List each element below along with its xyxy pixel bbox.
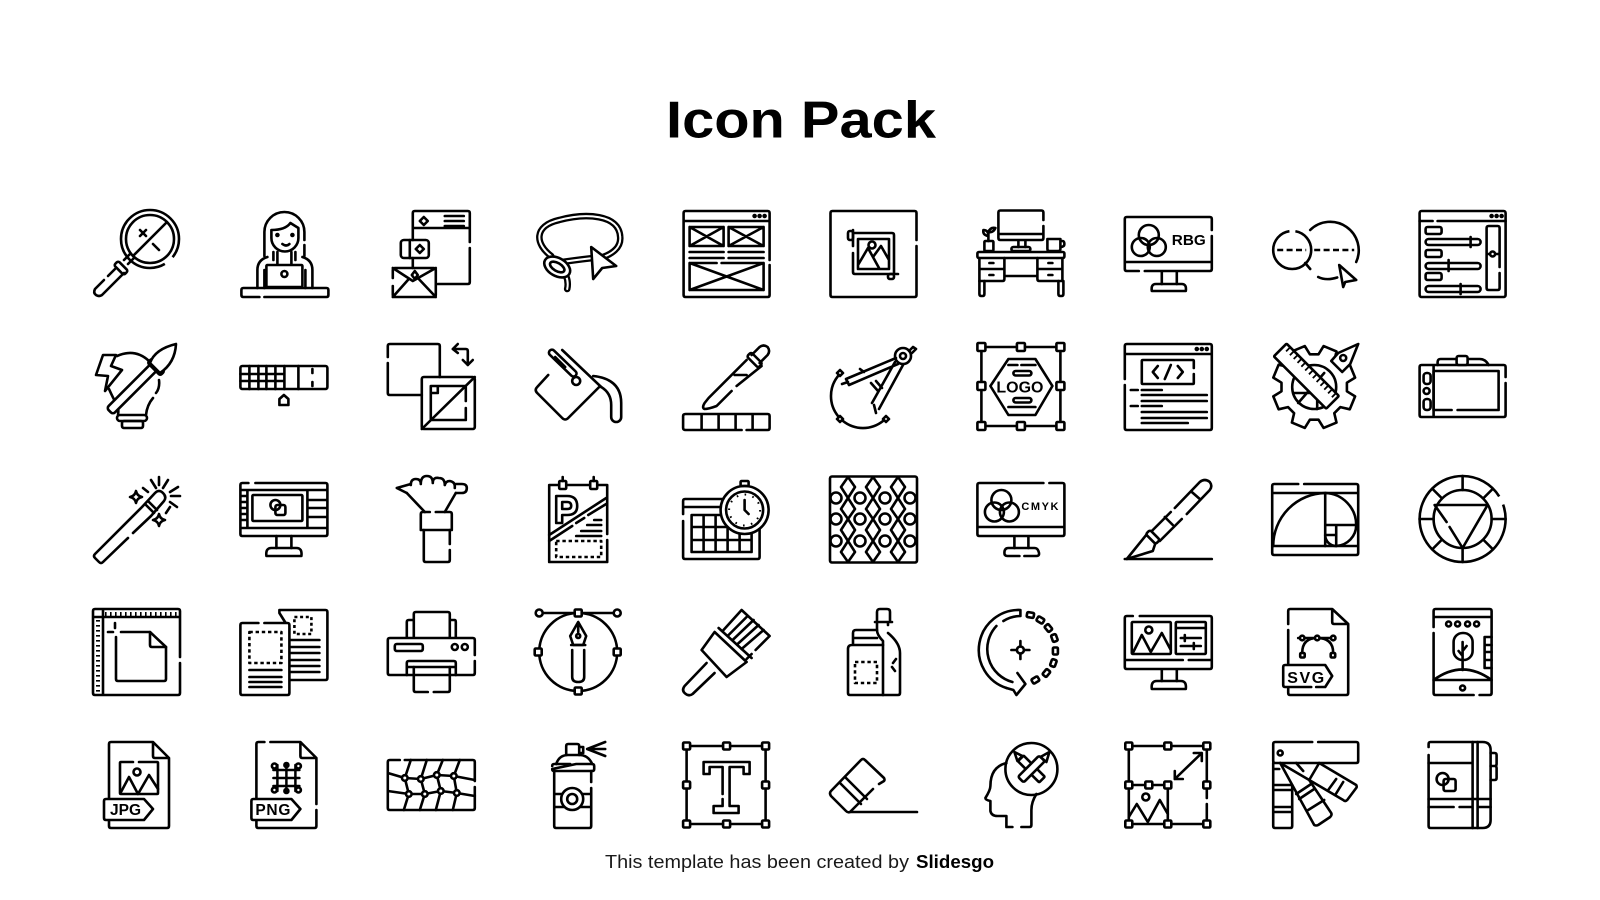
icon: swatch fan [1273,742,1358,828]
icon: CMYK monitor: CMYK [1021,501,1058,513]
icon: wireframe window [684,211,770,297]
icon: colour swatch row [240,366,327,405]
icon: JPG file [104,742,169,828]
icon: calendar and clock [683,481,769,559]
icon: magnifier [94,210,179,296]
icon: designer at laptop [241,212,328,297]
icon: poster flyer [549,477,607,562]
icon: mesh warp [388,760,475,810]
icon: magic wand [94,477,180,563]
icon: gear ruler and pen [1273,344,1358,428]
icon: woven pattern [830,476,917,562]
icon: code window [1125,344,1212,430]
icon: graphics tablet [1420,356,1506,417]
footer credit: This template has been created by [605,852,909,872]
icon: notebook [1429,742,1497,828]
icon: drawing compass [831,347,916,428]
icon: SVG file: SVG [1287,670,1324,687]
icon: design software monitor [240,483,327,556]
icon: hand holding pencil [397,476,467,562]
icon: RBG monitor [1125,217,1212,291]
icon: spray paint [552,742,605,828]
icon: rotation tool [979,610,1058,695]
footer credit: Slidesgo [916,852,994,872]
icon: printed pages [240,610,327,695]
icon: JPG file: JPG [110,802,141,819]
icon grid [93,210,1506,828]
title: Icon Pack [666,92,936,150]
icon: golden ratio [1272,484,1358,555]
icon: jar and bottle [848,609,900,695]
icon: image crop [830,211,916,297]
icon: eraser [830,759,917,812]
icon: logo selection box [977,343,1064,430]
icon: image controls monitor [1125,616,1212,689]
icon: CMYK monitor [977,483,1064,556]
icon: colour wheel [1420,476,1506,562]
icon: PNG file [251,742,316,828]
icon: craft knife [1125,480,1212,559]
icon: document on artboard [93,609,180,695]
icon: text tool [683,742,769,828]
icon: tablet with tree [1434,609,1492,695]
icon: web and mail layout [393,211,470,297]
icon: paint brush [683,610,770,695]
icon: pipette [683,346,770,430]
icon: paint bucket [536,348,621,422]
icon: desk and computer [977,210,1064,296]
icon: slider window [1420,211,1506,297]
icon: creative mind [985,743,1057,827]
icon: circle scale [1273,222,1359,287]
icon: overlapping squares [388,344,475,429]
icon: SVG file [1283,609,1348,695]
icon: resize image [1125,742,1210,828]
icon: pen tool with anchor points [535,610,621,694]
icon: logo selection box: LOGO [996,380,1043,396]
icon: lasso tool [539,216,620,289]
icon: PNG file: PNG [255,802,290,819]
icon: RBG monitor: RBG [1172,232,1206,249]
icon: printer [388,612,475,692]
icon: bulb and brush [96,344,176,428]
